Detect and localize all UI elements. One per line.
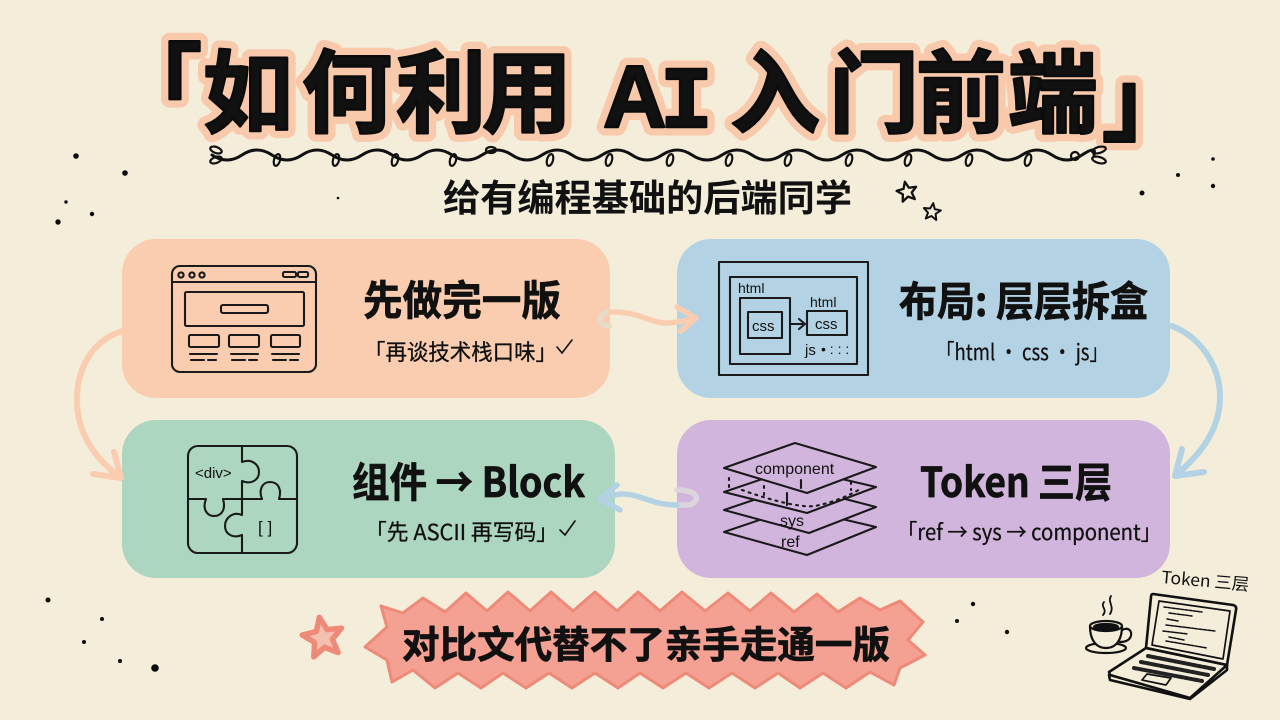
laptop label: Token 三层: [1161, 563, 1250, 596]
icon: stacked layers: component: [755, 461, 835, 478]
title letters: 如何利用: [203, 21, 572, 151]
icon: stacked layers: ref: [781, 534, 800, 551]
title halo: A: [603, 47, 667, 146]
arrow: right curved blue: [1172, 326, 1220, 476]
title letters: [112, 14, 1192, 159]
icon: nested boxes: css: [752, 318, 774, 335]
subheading: 「再谈技术栈口味」: [364, 335, 557, 367]
icon: laptop: [1109, 594, 1236, 699]
icon: stacked layers: [724, 443, 876, 555]
subheading: 「html · css · js」: [936, 335, 1108, 367]
panel: components to blocks: [122, 420, 615, 578]
title halo: 如何利用: [203, 21, 572, 151]
heading: 先做完一版: [363, 267, 561, 327]
banner text: 对比文代替不了亲手走通一版: [402, 614, 890, 669]
heading: Token 三层: [920, 449, 1112, 509]
subheading: 「先 ASCII 再写码」: [365, 515, 558, 547]
icon: nested boxes: js: [804, 342, 816, 359]
title letters: 」: [1102, 29, 1192, 159]
icon: coffee cup: [1086, 596, 1131, 653]
icon: coral star: [300, 614, 346, 658]
title letters: 「: [112, 14, 202, 144]
icon: puzzle: [188, 446, 297, 553]
title letters: A: [603, 47, 667, 146]
heading: 组件 → Block: [352, 449, 585, 509]
icon: nested boxes: [719, 262, 868, 375]
banner: [365, 592, 925, 688]
icon: nested boxes: • : : :: [821, 341, 849, 357]
icon: puzzle: <div>: [195, 465, 232, 482]
title: [112, 14, 1192, 159]
title halo: 入门前端: [730, 21, 1098, 151]
subtitle: 给有编程基础的后端同学: [443, 168, 852, 222]
wavy divider: [209, 145, 1107, 167]
title letters: I: [660, 55, 713, 154]
icon: nested boxes: html: [810, 294, 836, 310]
icon: stacked layers: sys: [780, 513, 804, 530]
title halo: 「: [112, 14, 202, 144]
title halo: 」: [1102, 29, 1192, 159]
title halo: I: [660, 55, 713, 154]
icon: two stars: [895, 180, 942, 220]
panel: finish one version first: [122, 239, 610, 398]
icon: puzzle: [ ]: [258, 518, 272, 537]
title halo: [112, 14, 1192, 159]
arrow: left curved peach: [77, 331, 122, 478]
icon: check mark: [557, 340, 572, 353]
icon: check mark: [560, 521, 575, 535]
icon: nested boxes: css: [815, 316, 838, 333]
arrow: bottom blue: [600, 485, 696, 510]
subheading: 「ref → sys → component」: [897, 515, 1161, 547]
decorative ink dots: [46, 153, 1215, 672]
panel: token layers: [677, 420, 1170, 578]
arrow: top peach: [600, 307, 696, 331]
panel: layout: [677, 239, 1170, 398]
icon: browser wireframe: [172, 266, 316, 372]
heading: 布局: 层层拆盒: [899, 268, 1148, 328]
icon: nested boxes: html: [738, 280, 764, 296]
title letters: 入门前端: [730, 21, 1098, 151]
